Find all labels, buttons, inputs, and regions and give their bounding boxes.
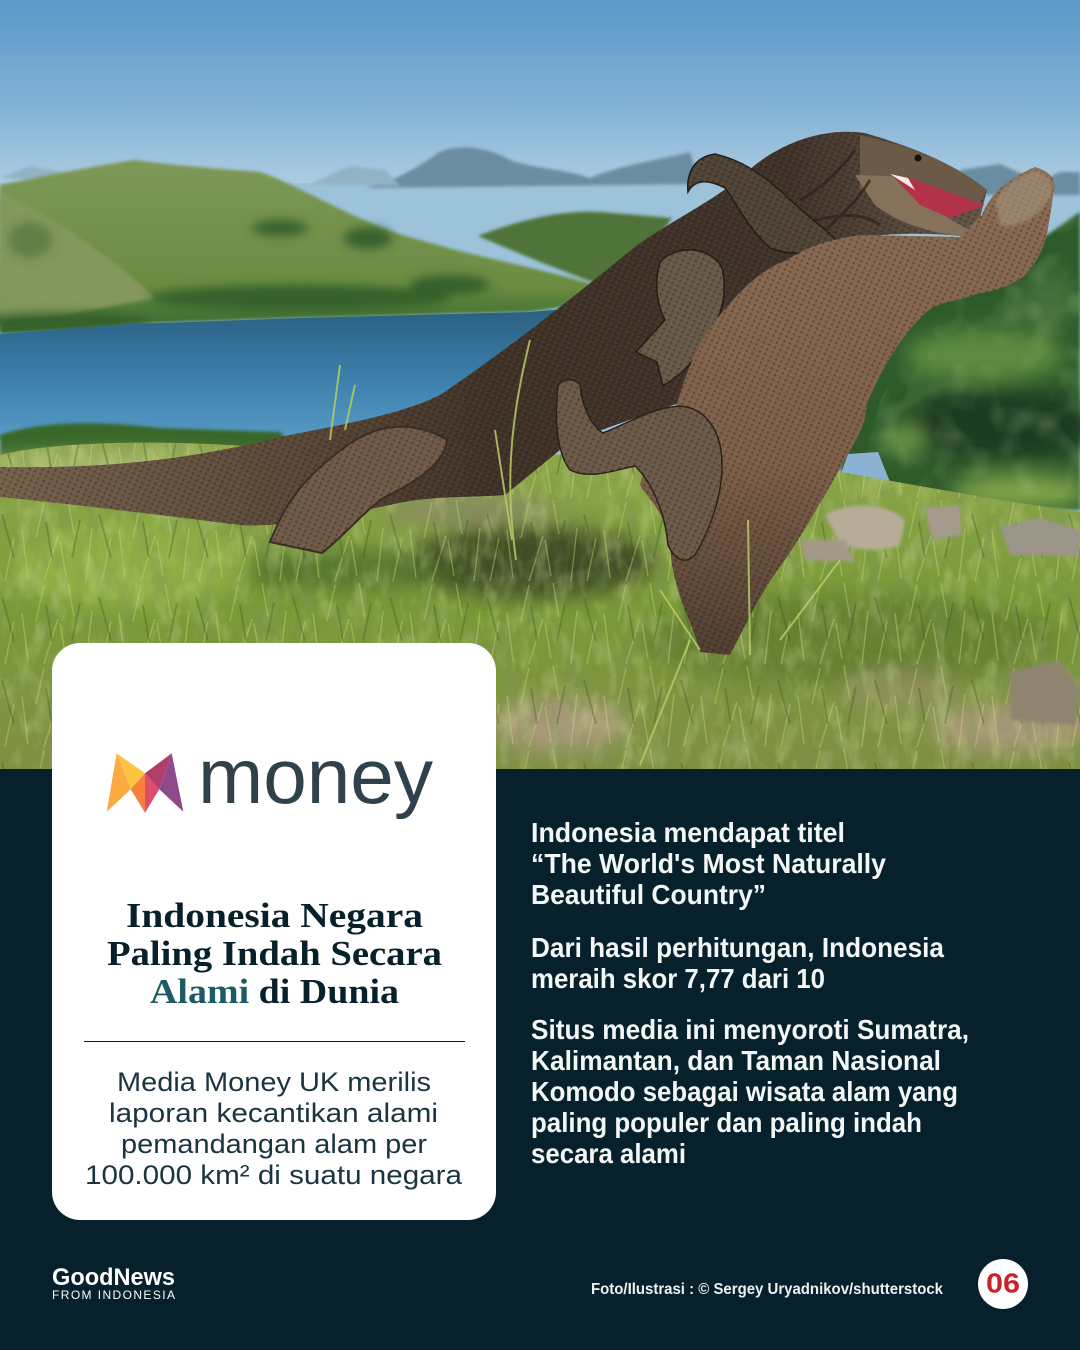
right column text — [531, 817, 969, 1169]
card description: pemandangan alam per — [121, 1129, 427, 1159]
photo: komodo dragons on a grassy hill — [0, 0, 1080, 769]
back dragon open mouth — [892, 175, 985, 218]
paragraph 3: Kalimantan, dan Taman Nasional — [531, 1045, 941, 1076]
forest foliage texture — [870, 216, 1080, 498]
sky — [0, 0, 1080, 200]
card title: Indonesia Negara — [126, 896, 423, 935]
far shore grass — [0, 420, 287, 455]
back dragon lower jaw — [855, 175, 975, 237]
right forest — [840, 212, 1080, 510]
paragraph 2: Dari hasil perhitungan, Indonesia — [531, 932, 945, 963]
small blue object in background — [842, 452, 890, 481]
rocks — [800, 505, 1080, 725]
paragraph 1 — [531, 817, 887, 910]
paragraph 3: Situs media ini menyoroti Sumatra, — [531, 1014, 969, 1045]
paragraph 3: secara alami — [531, 1138, 686, 1169]
white card — [52, 643, 496, 1220]
paragraph 1: Beautiful Country” — [531, 879, 766, 910]
paragraph 1: Indonesia mendapat titel — [531, 817, 845, 848]
left green hill — [0, 160, 595, 334]
paragraph 3: Komodo sebagai wisata alam yang — [531, 1076, 958, 1107]
back dragon — [0, 132, 987, 553]
lagoon — [0, 310, 557, 440]
front dragon snout highlight — [995, 170, 1052, 226]
paragraph 3 — [531, 1014, 969, 1169]
back dragon tail and body — [0, 132, 987, 525]
back dragon clawed arm — [636, 250, 724, 386]
page number badge — [978, 1259, 1028, 1309]
card description — [85, 1067, 463, 1190]
logo: money — [107, 732, 433, 820]
paragraph 3: paling populer dan paling indah — [531, 1107, 922, 1138]
front dragon — [556, 167, 1054, 655]
hill shrubs — [0, 220, 490, 331]
grassy ground — [0, 443, 1080, 769]
footer logo: GoodNews: FROM INDONESIA — [52, 1288, 175, 1302]
distant sea — [0, 183, 1080, 513]
footer logo: GoodNews: GoodNews — [52, 1264, 175, 1291]
ground shading — [0, 454, 1080, 753]
card title — [107, 896, 442, 1011]
card description: Media Money UK merilis — [117, 1067, 431, 1097]
page number badge: 06 — [986, 1268, 1020, 1298]
logo mark — [107, 753, 183, 813]
back dragon upper arm — [688, 154, 836, 253]
back dragon eye — [914, 154, 922, 162]
paragraph 2 — [531, 932, 945, 994]
grass texture — [0, 440, 1080, 769]
card description: 100.000 km² di suatu negara — [85, 1160, 463, 1190]
back dragon hind leg — [270, 427, 447, 553]
back dragon head — [860, 135, 987, 205]
front dragon body and neck — [640, 167, 1054, 655]
foreground grass in front of dragon — [330, 340, 840, 765]
near hill slope — [0, 192, 155, 322]
card description: laporan kecantikan alami — [109, 1098, 438, 1128]
card title: Paling Indah Secara — [107, 934, 442, 973]
back dragon neck folds — [800, 150, 880, 240]
card title: Alami di Dunia — [150, 972, 399, 1011]
paragraph 1: “The World's Most Naturally — [531, 848, 887, 879]
second hill behind dragon — [478, 212, 672, 285]
paragraph 2: meraih skor 7,77 dari 10 — [531, 963, 825, 994]
logo wordmark: money — [198, 732, 433, 820]
distant islands — [0, 147, 1080, 195]
photo credit: Foto/Ilustrasi : © Sergey Uryadnikov/shutterstock — [591, 1281, 943, 1298]
front dragon foreleg — [556, 380, 722, 560]
